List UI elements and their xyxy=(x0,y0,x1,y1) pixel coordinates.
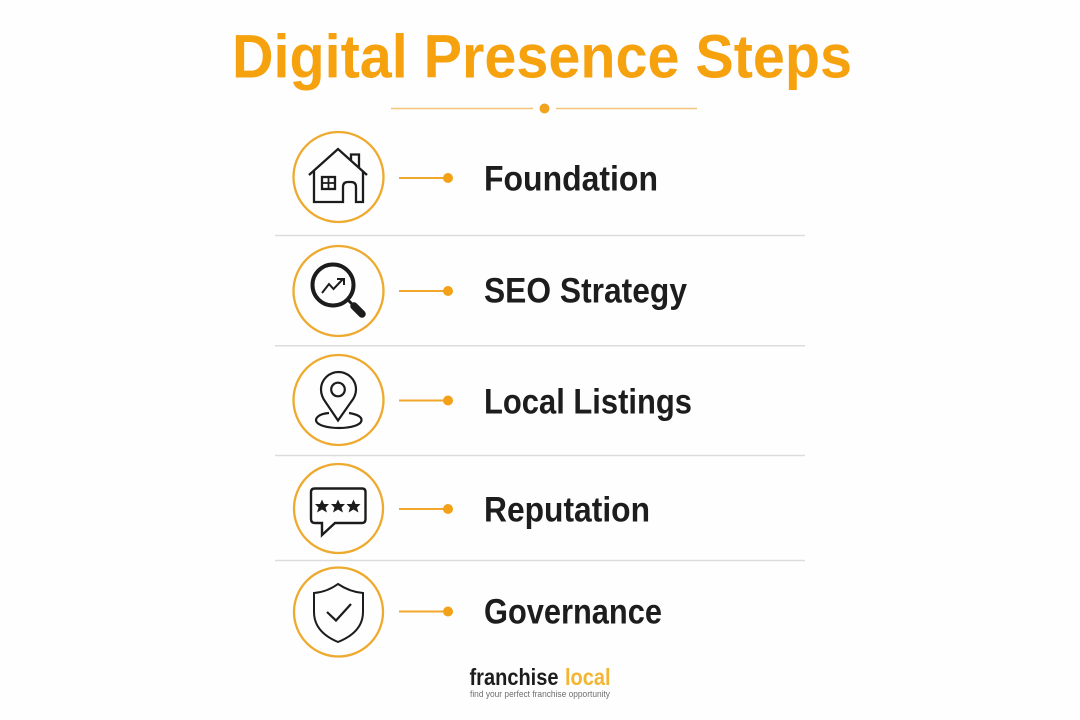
icon: shield with check xyxy=(294,568,383,656)
label: Foundation xyxy=(484,160,658,198)
logo: franchise local: local xyxy=(565,664,610,690)
connector xyxy=(399,286,453,296)
connector xyxy=(399,173,453,183)
logo: franchise local xyxy=(470,664,610,699)
title: Digital Presence Steps xyxy=(232,22,852,90)
label: Governance xyxy=(484,592,662,632)
connector xyxy=(399,504,453,514)
step: Reputation xyxy=(294,464,650,553)
icon: speech bubble with stars xyxy=(294,464,383,553)
logo: franchise local: franchise xyxy=(470,664,558,690)
connector xyxy=(399,606,453,616)
icon: house xyxy=(294,132,384,222)
step: Foundation xyxy=(294,132,658,222)
icon: location pin xyxy=(294,355,384,445)
label: Local Listings xyxy=(484,382,692,422)
icon: magnifier with growth arrow xyxy=(294,246,384,336)
connector xyxy=(399,396,453,406)
label: Reputation xyxy=(484,490,650,530)
step: Governance xyxy=(294,568,662,656)
title divider xyxy=(391,104,697,114)
logo tagline: find your perfect franchise opportunity xyxy=(470,689,610,699)
label: SEO Strategy xyxy=(484,272,687,310)
step: SEO Strategy xyxy=(294,246,687,336)
step: Local Listings xyxy=(294,355,692,445)
